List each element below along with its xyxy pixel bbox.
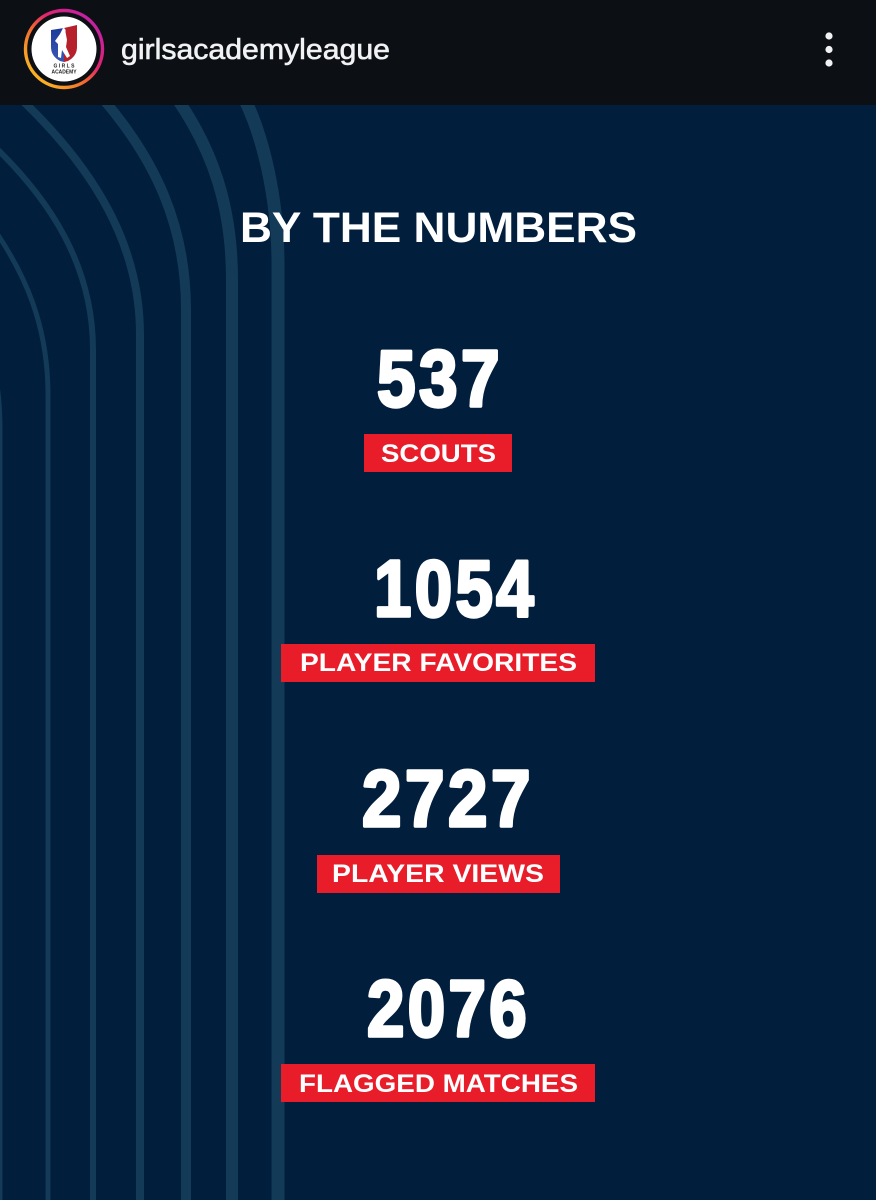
title: BY THE NUMBERS bbox=[240, 204, 637, 252]
decorative track arcs bbox=[0, 100, 278, 1200]
label: scouts: SCOUTS bbox=[381, 440, 496, 468]
label: player favorites: PLAYER FAVORITES bbox=[300, 649, 577, 677]
label: player views bbox=[317, 855, 560, 893]
label: flagged matches: FLAGGED MATCHES bbox=[299, 1070, 578, 1098]
logo wordmark: GIRLS bbox=[54, 64, 75, 70]
account name: girlsacademyleague bbox=[121, 34, 390, 66]
stat: player views bbox=[317, 754, 560, 893]
number: 2727: 2727 bbox=[362, 754, 534, 843]
label: flagged matches bbox=[281, 1064, 595, 1102]
stat: flagged matches bbox=[281, 964, 595, 1102]
logo wordmark: ACADEMY bbox=[52, 70, 77, 76]
logo wordmark bbox=[52, 64, 77, 76]
stat: player favorites bbox=[281, 544, 595, 682]
label: player favorites bbox=[281, 644, 595, 682]
icon: more menu dots bbox=[825, 32, 833, 67]
profile avatar bbox=[26, 10, 102, 88]
label: player views: PLAYER VIEWS bbox=[332, 860, 544, 888]
header bar bbox=[0, 0, 876, 105]
number: 1054: 1054 bbox=[374, 544, 537, 633]
number: 537: 537 bbox=[377, 334, 503, 423]
number: 2076: 2076 bbox=[367, 964, 530, 1053]
logo shield bbox=[51, 25, 77, 62]
label: scouts bbox=[364, 434, 512, 472]
stat: scouts bbox=[364, 334, 512, 472]
